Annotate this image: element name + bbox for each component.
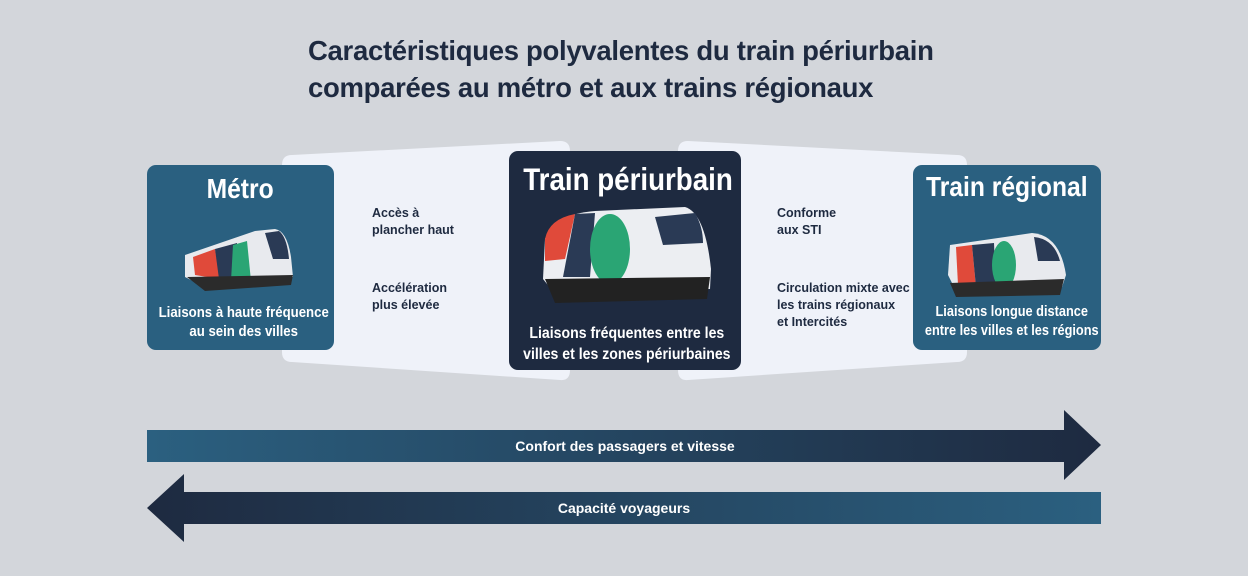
panel: Métro: Liaisons à haute fréquence <box>159 304 329 321</box>
icon: metro train <box>185 229 293 291</box>
panel: Train régional: Train régional <box>926 171 1088 202</box>
text: features right: Conforme <box>777 206 836 220</box>
icon: suburban train <box>543 207 711 303</box>
text: features left <box>372 206 454 237</box>
title: comparées au métro et aux trains régionaux <box>308 72 873 103</box>
text: features left: plancher haut <box>372 223 454 237</box>
text: les trains régionaux <box>777 298 895 312</box>
arrow: passenger capacity: Capacité voyageurs <box>558 500 690 516</box>
title <box>308 35 934 103</box>
arrow: comfort and speed: Confort des passagers et vitesse <box>515 438 735 454</box>
text: Circulation mixte avec <box>777 281 910 295</box>
panel: Train périurbain: Liaisons fréquentes entre les <box>529 325 724 342</box>
text: features right <box>777 206 836 237</box>
panel: Train périurbain: villes et les zones périurbaines <box>523 346 731 363</box>
text: plus élevée <box>372 298 439 312</box>
icon: regional train <box>948 233 1066 297</box>
text: features right: aux STI <box>777 223 821 237</box>
text: et Intercités <box>777 315 847 329</box>
panel: Métro: Métro <box>207 173 274 204</box>
title: Caractéristiques polyvalentes du train périurbain <box>308 35 934 66</box>
panel: Métro: au sein des villes <box>189 323 298 340</box>
panel: Train régional: Liaisons longue distance <box>936 304 1088 320</box>
panel: Train périurbain <box>509 151 741 370</box>
text: features left: Accès à <box>372 206 419 220</box>
panel: Métro <box>147 165 334 350</box>
text: Accélération <box>372 281 447 295</box>
panel: Train régional: entre les villes et les régions <box>925 323 1099 339</box>
panel: Train périurbain: Train périurbain <box>523 161 733 197</box>
panel: Train régional <box>913 165 1101 350</box>
